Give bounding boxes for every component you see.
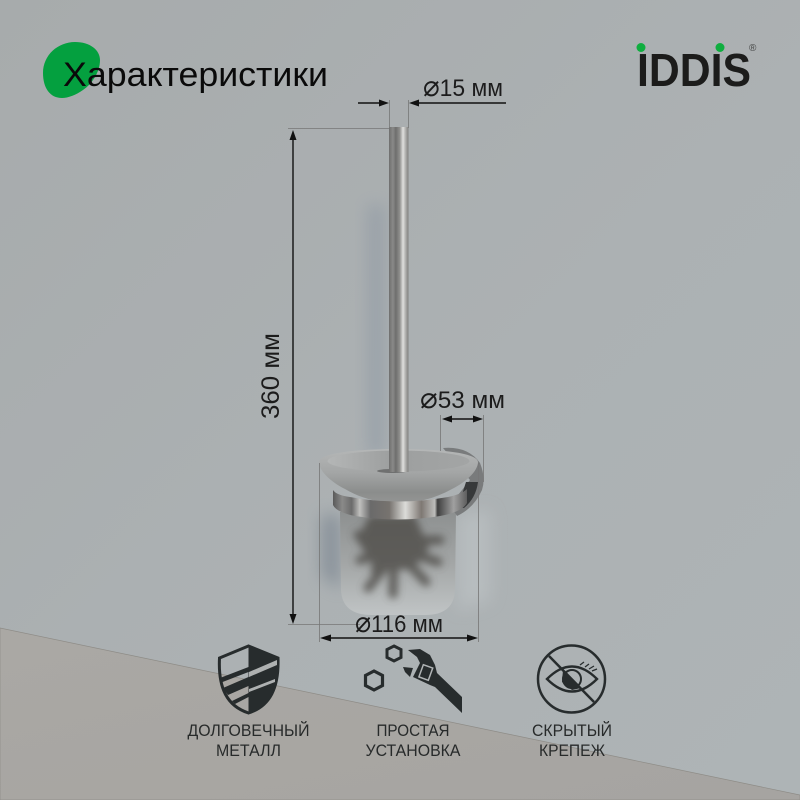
dimension: diameter 15 mm [358, 71, 506, 128]
dimension: height 360 mm [257, 128, 389, 624]
product: toilet brush holder [319, 127, 490, 615]
label: easy installation: УСТАНОВКА [366, 741, 461, 760]
label: hidden fastening [532, 721, 612, 760]
green blob [43, 42, 100, 98]
dimension: height 360 mm: 360 мм [257, 333, 285, 419]
dimension: diameter 116 mm [320, 463, 478, 642]
label: easy installation [366, 721, 461, 760]
floor [0, 628, 800, 800]
icon: wrench and nuts [366, 646, 462, 713]
dimension: diameter 53 mm: ⌀53 мм [420, 383, 505, 415]
label: durable metal [188, 721, 310, 760]
label: hidden fastening: СКРЫТЫЙ [532, 721, 612, 740]
title: Характеристики [63, 56, 328, 94]
dimension: diameter 116 mm: ⌀116 мм [355, 607, 443, 639]
label: durable metal: МЕТАЛЛ [216, 741, 281, 760]
wall mount [443, 448, 484, 516]
label: hidden fastening: КРЕПЕЖ [539, 741, 605, 760]
dimension: diameter 15 mm: ⌀15 мм [423, 71, 503, 103]
label: easy installation: ПРОСТАЯ [376, 721, 450, 740]
brush bristles [358, 520, 440, 594]
bowl inner [328, 450, 470, 472]
icon: hidden mount, crossed eye [538, 646, 605, 712]
IDDIS logo: ® [749, 43, 757, 54]
label: durable metal: ДОЛГОВЕЧНЫЙ [188, 721, 310, 740]
IDDIS logo: IDDIS [637, 44, 751, 96]
bowl [319, 449, 478, 503]
pole [389, 127, 408, 472]
metal ring [333, 489, 467, 520]
dimension: diameter 53 mm [420, 383, 505, 482]
icon: shield [219, 645, 279, 714]
glass cup [340, 512, 456, 615]
